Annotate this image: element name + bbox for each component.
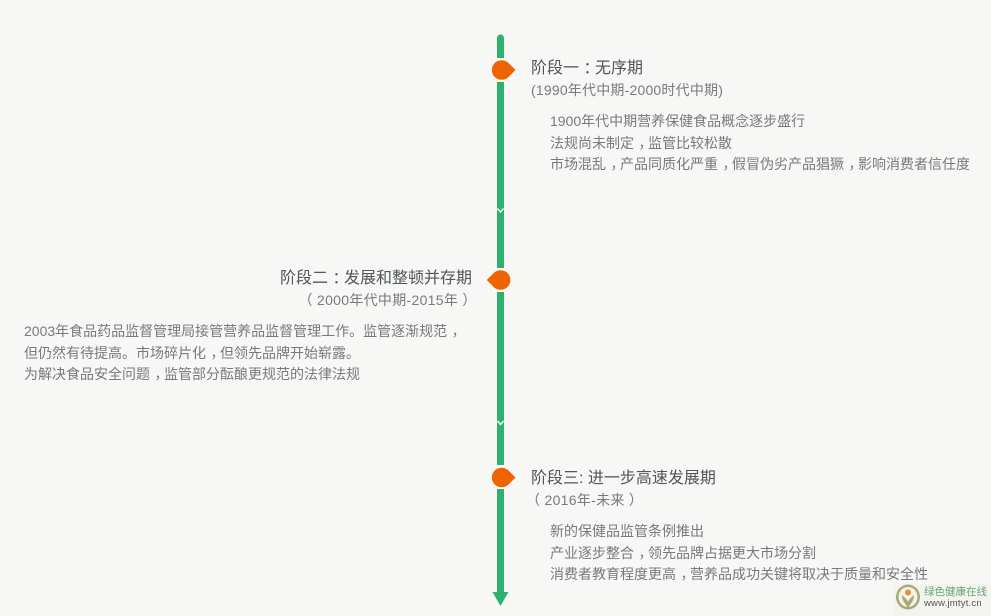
icon: logo emblem bbox=[896, 584, 920, 610]
body text: stage 3: 产业逐步整合 ，领先品牌占据更大市场分割 bbox=[550, 544, 816, 560]
chevron: upper bbox=[498, 208, 504, 212]
body text: stage 2: 但仍然有待提高。市场碎片化 ，但领先品牌开始崭露。 bbox=[24, 344, 360, 360]
date range: stage 2: （ 2000年代中期-2015年 ） bbox=[298, 292, 477, 308]
marker gap: stage 2 bbox=[496, 268, 505, 292]
marker gap: stage 3 bbox=[496, 465, 505, 489]
logo name: 绿色健康在线 bbox=[924, 586, 987, 598]
heading: stage 2: 阶段二 ：发展和整顿并存期 bbox=[280, 270, 472, 287]
body text: stage 3: 新的保健品监管条例推出 bbox=[550, 523, 704, 539]
body text: stage 2: 2003年食品药品监督管理局接管营养品监督管理工作。监管逐渐规范 ， bbox=[24, 323, 466, 339]
marker: stage 2 pin bbox=[487, 270, 510, 290]
date range: stage 3: （ 2016年-未来 ） bbox=[526, 492, 643, 508]
heading: stage 3: 阶段三: 进一步高速发展期 bbox=[531, 470, 716, 487]
watermark logo bbox=[893, 584, 991, 616]
marker: stage 1 pin bbox=[492, 60, 516, 80]
body text: stage 1 bbox=[550, 113, 970, 172]
body text: stage 1: 1900年代中期营养保健食品概念逐步盛行 bbox=[550, 113, 805, 129]
body text: stage 2: 为解决食品安全问题 ，监管部分酝酿更规范的法律法规 bbox=[24, 366, 360, 382]
panel: stage 3 bbox=[526, 469, 928, 582]
body text: stage 2 bbox=[24, 323, 466, 382]
timeline arrowhead bbox=[492, 592, 508, 606]
heading: stage 1: 阶段一 ：无序期 bbox=[531, 60, 643, 77]
date range: stage 1: (1990年代中期-2000时代中期) bbox=[531, 82, 723, 98]
body text: stage 3 bbox=[550, 523, 928, 582]
body text: stage 1: 法规尚未制定 ，监管比较松散 bbox=[550, 134, 732, 150]
vertical timeline bar bbox=[497, 34, 504, 594]
logo url: www.jmtyt.cn bbox=[924, 598, 982, 609]
panel: stage 1 bbox=[531, 59, 970, 172]
chevron: lower bbox=[498, 421, 504, 424]
body text: stage 1: 市场混乱 ，产品同质化严重 ，假冒伪劣产品猖獗 ，影响消费者信任度 bbox=[550, 156, 970, 172]
marker: stage 3 pin bbox=[492, 468, 516, 487]
body text: stage 3: 消费者教育程度更高 ，营养品成功关键将取决于质量和安全性 bbox=[550, 566, 928, 582]
panel: stage 2 bbox=[24, 269, 477, 382]
marker gap: stage 1 bbox=[496, 58, 505, 82]
